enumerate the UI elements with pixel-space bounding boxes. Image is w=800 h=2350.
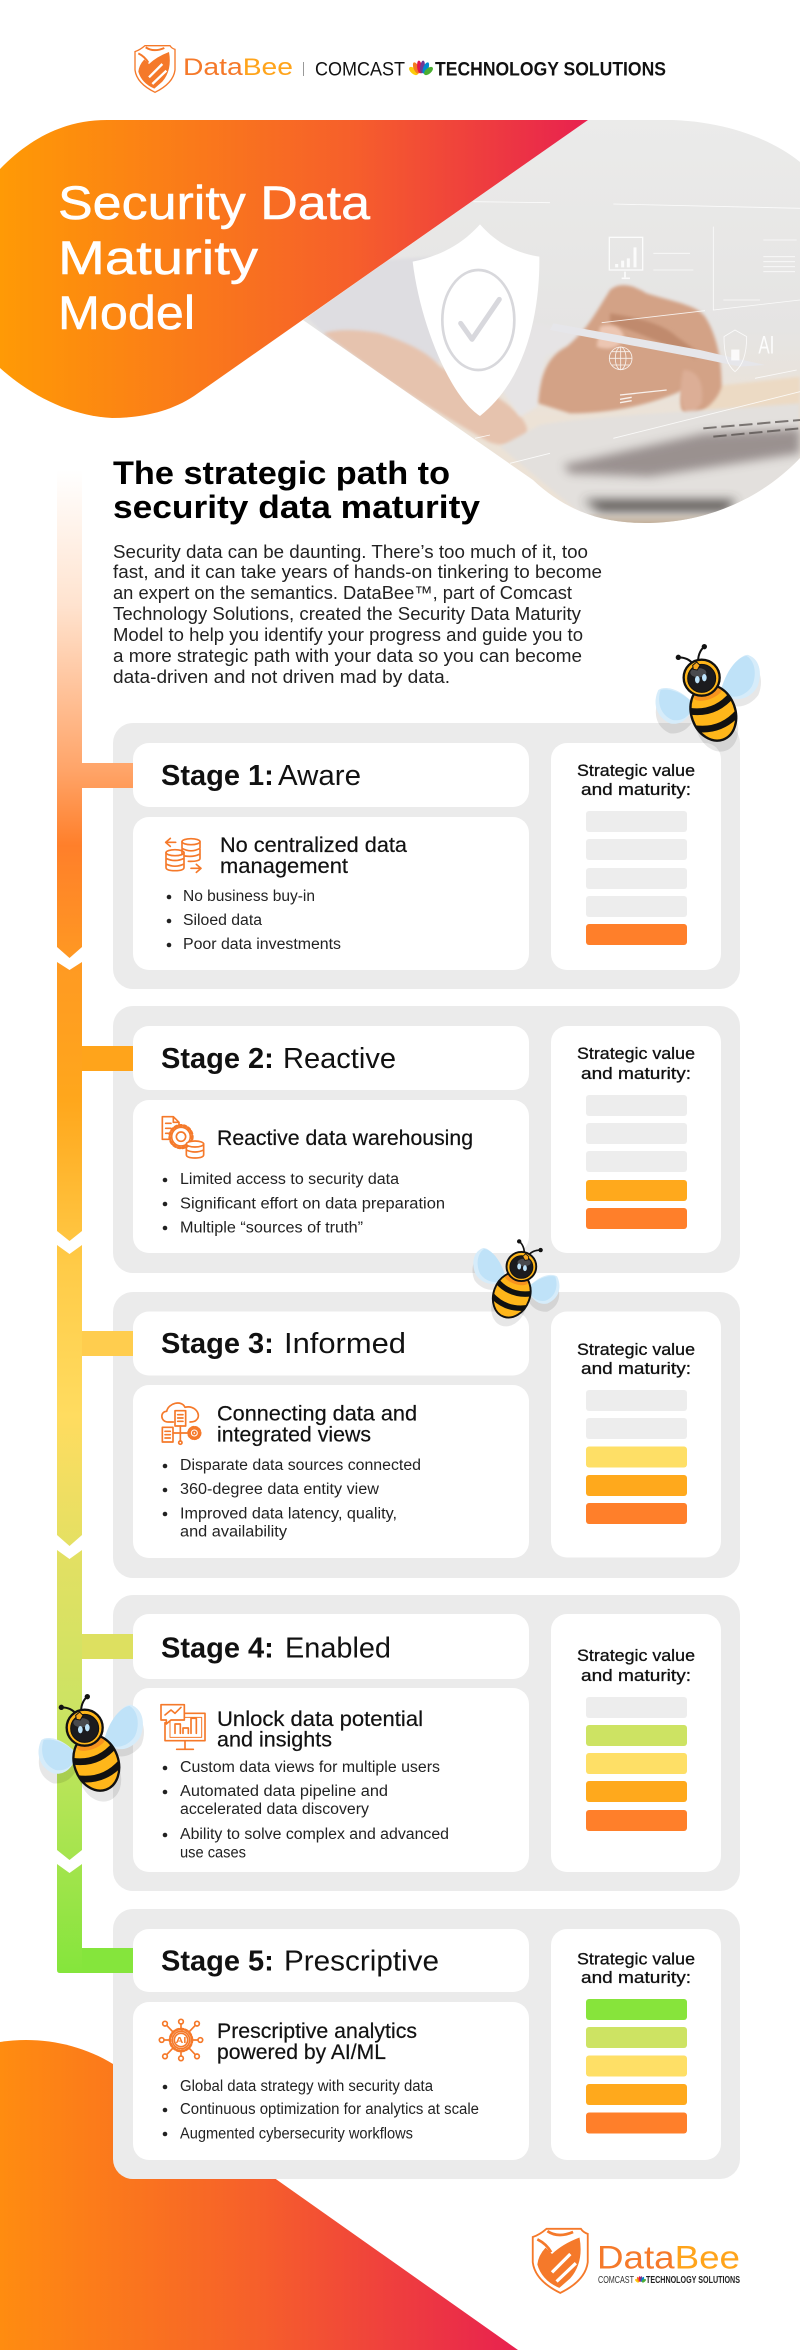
stage 3 connector (82, 1331, 134, 1356)
DataBee wordmark: Data Bee (597, 2240, 740, 2276)
stage 5 background (113, 1909, 740, 2179)
stage 2 connector (82, 1046, 134, 1071)
stage 5 maturity: Strategic value (577, 1950, 695, 1968)
stage 2 title: Reactive (283, 1043, 396, 1075)
panel: stage 1 (82, 723, 740, 989)
bullet list: No business buy-in (183, 888, 315, 905)
stage 5 maturity (551, 1929, 721, 2160)
bee mascot top right (656, 644, 761, 758)
stage 4 maturity (551, 1614, 721, 1872)
icon: AI chip (159, 2019, 203, 2061)
DataBee wordmark: Data Bee (183, 54, 293, 81)
stage 4 background (113, 1595, 740, 1891)
panel: stage 4 (82, 1595, 740, 1891)
stage 3 details: integrated views (217, 1424, 371, 1446)
stage 3 maturity (551, 1312, 721, 1558)
icon: warehouse gear (162, 1117, 204, 1158)
footer logo (533, 2229, 740, 2293)
stage 5 title (133, 1929, 529, 1992)
icon: analytics monitor (161, 1705, 205, 1749)
header logo lockup (135, 46, 666, 92)
timeline path arrow (57, 470, 82, 1973)
bullet list: Improved data latency, quality, (180, 1506, 397, 1522)
stage 5 title: Stage 5: (161, 1946, 274, 1978)
title: Maturity (58, 231, 259, 284)
bullet list (163, 2078, 479, 2142)
stage 5 connector (82, 1948, 134, 1973)
Comcast Technology Solutions line: TECHNOLOGY SOLUTIONS (646, 2275, 740, 2286)
bullet list: Limited access to security data (180, 1171, 399, 1188)
stage 1 maturity: Strategic value (577, 762, 695, 780)
subheading: The strategic path to (113, 455, 450, 491)
icon: DataBee shield (135, 46, 175, 92)
stage 2 maturity (551, 1026, 721, 1253)
bullet list (163, 1171, 445, 1236)
stage 1 maturity (551, 743, 721, 970)
stage 4 title: Stage 4: (161, 1632, 274, 1664)
footer orange shape (0, 2040, 518, 2350)
bullet list: Multiple “sources of truth” (180, 1220, 363, 1236)
stage 3 title (133, 1312, 529, 1376)
intro paragraph: a more strategic path with your data so you can become (113, 645, 582, 666)
stage 4 connector (82, 1634, 134, 1659)
stage 4 details: and insights (217, 1728, 332, 1752)
bullet list: use cases (180, 1844, 246, 1862)
Technology Solutions wordmark: TECHNOLOGY SOLUTIONS (435, 58, 666, 80)
stage 5 details (133, 2002, 529, 2160)
icon: shield with check (413, 224, 539, 416)
title: Model (58, 286, 195, 339)
intro paragraph: Technology Solutions, created the Security Data Maturity (113, 603, 582, 624)
title (58, 176, 371, 339)
stage 2 maturity: Strategic value (577, 1045, 695, 1063)
stage 3 title: Stage 3: (161, 1328, 274, 1360)
stage 3 maturity: Strategic value (577, 1341, 695, 1359)
intro paragraph: an expert on the semantics. DataBee™, part of Comcast (113, 582, 572, 603)
stage 4 maturity: and maturity: (581, 1667, 691, 1685)
stage 2 details: Reactive data warehousing (217, 1127, 473, 1150)
stage 3 maturity: and maturity: (581, 1360, 691, 1378)
stage 1 connector (82, 763, 134, 788)
stage 3 background (113, 1292, 740, 1578)
intro paragraph: fast, and it can take years of hands-on tinkering to become (113, 561, 602, 582)
panel: stage 3 (82, 1292, 740, 1578)
stage 5 title: Prescriptive (284, 1946, 439, 1978)
intro paragraph: Security data can be daunting. There’s too much of it, too (113, 541, 588, 562)
stage 5 maturity: and maturity: (581, 1969, 691, 1987)
stage 1 background (113, 723, 740, 989)
bullet list: Continuous optimization for analytics at scale (180, 2101, 479, 2118)
stage 1 title (133, 743, 529, 807)
icon: DataBee shield (533, 2229, 588, 2293)
stage 1 details (133, 817, 529, 970)
bullet list: 360-degree data entity view (180, 1481, 380, 1498)
stage 1 details: management (220, 855, 348, 878)
stage 2 title: Stage 2: (161, 1043, 274, 1075)
subheading (113, 455, 480, 525)
Comcast Technology Solutions line (598, 2275, 740, 2286)
stage 1 title: Aware (278, 760, 361, 792)
icon: AI chip: AI (176, 2036, 186, 2045)
bullet list: Augmented cybersecurity workflows (180, 2126, 413, 2142)
bullet list (167, 888, 341, 953)
bullet list: accelerated data discovery (180, 1801, 369, 1818)
bullet list: Significant effort on data preparation (180, 1196, 445, 1212)
hero photo (300, 120, 800, 533)
bullet list (163, 1457, 421, 1540)
stage 4 maturity: Strategic value (577, 1647, 695, 1665)
stage 4 details (133, 1688, 529, 1872)
stage 4 title: Enabled (285, 1632, 391, 1664)
Comcast Technology Solutions line: COMCAST (598, 2275, 634, 2286)
bullet list: Custom data views for multiple users (180, 1759, 440, 1776)
icon: data stacks (166, 838, 201, 872)
stage 5 details: Prescriptive analytics (217, 2020, 417, 2043)
title: Security Data (58, 176, 371, 229)
icon: peacock (408, 60, 434, 77)
panel: stage 5 (82, 1909, 740, 2179)
stage 2 maturity: and maturity: (581, 1065, 691, 1083)
stage 2 details (133, 1100, 529, 1253)
panel: stage 2 (82, 1006, 740, 1273)
stage 1 maturity: and maturity: (581, 781, 691, 799)
bullet list (163, 1759, 449, 1862)
stage 2 background (113, 1006, 740, 1273)
stage 3 details (133, 1385, 529, 1558)
stage 4 title (133, 1614, 529, 1679)
Comcast wordmark: COMCAST (315, 58, 405, 80)
stage 2 title (133, 1026, 529, 1090)
stage 3 details: Connecting data and (217, 1402, 417, 1426)
intro paragraph: Model to help you identify your progress and guide you to (113, 624, 583, 645)
stage 1 title: Stage 1: (161, 760, 274, 792)
bee mascot left (39, 1694, 144, 1808)
bullet list: Siloed data (183, 912, 262, 929)
bullet list: Ability to solve complex and advanced (180, 1826, 449, 1843)
hero photo: AI (758, 332, 774, 359)
bullet list: and availability (180, 1524, 287, 1540)
intro paragraph (113, 541, 602, 687)
icon: cloud data (162, 1403, 200, 1444)
stage 3 title: Informed (284, 1328, 406, 1360)
hero orange banner (0, 120, 588, 418)
bee mascot middle (472, 1239, 559, 1331)
intro paragraph: data-driven and not driven mad by data. (113, 666, 450, 687)
bullet list: Poor data investments (183, 936, 341, 953)
bullet list: Automated data pipeline and (180, 1783, 388, 1800)
stage 5 details: powered by AI/ML (217, 2041, 386, 2064)
subheading: security data maturity (113, 489, 480, 525)
bullet list: Disparate data sources connected (180, 1457, 421, 1474)
stage 4 details: Unlock data potential (217, 1708, 423, 1731)
bullet list: Global data strategy with security data (180, 2078, 433, 2095)
stage 1 details: No centralized data (220, 834, 407, 857)
